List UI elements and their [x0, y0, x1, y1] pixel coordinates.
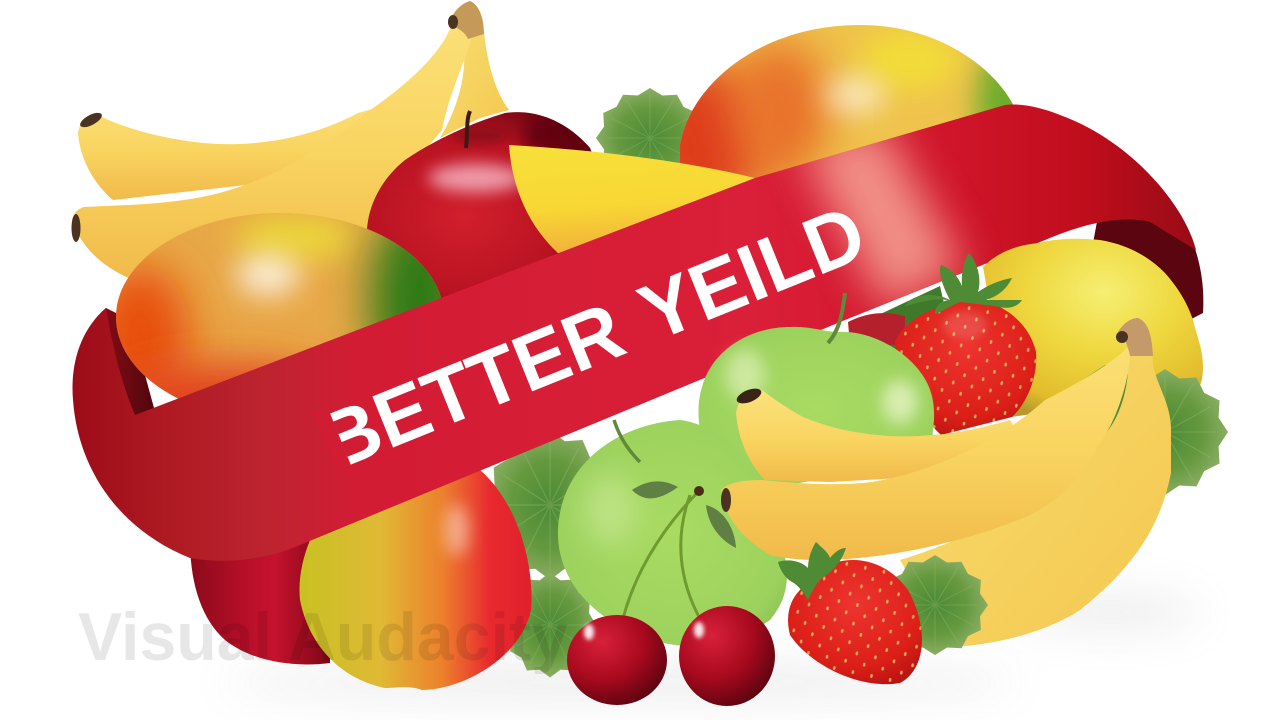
mango: left	[116, 213, 442, 398]
bananas: right	[721, 318, 1171, 647]
strawberry: top	[848, 253, 1036, 435]
ribbon: front band	[72, 104, 1196, 561]
red apple: bottom left	[190, 530, 330, 664]
watermark: Visual Audacity	[78, 599, 568, 675]
ribbon: dark inner back right	[1090, 195, 1203, 330]
green apple: large	[558, 420, 787, 646]
mango: top right	[680, 25, 1013, 184]
ribbon: dark inner back left	[74, 308, 160, 430]
leaf: behind apple	[596, 88, 704, 188]
bananas: top left	[72, 1, 509, 280]
strawberry: bottom	[778, 542, 922, 684]
ribbon label: BETTER YEILD	[308, 188, 877, 487]
mango slice	[509, 145, 755, 255]
leaves: behind green apple	[485, 430, 615, 678]
mango: bottom	[299, 470, 532, 690]
ground shadow	[220, 596, 1200, 696]
mango: right yellow	[983, 239, 1203, 417]
cherries	[567, 481, 775, 706]
leaf: bottom strawberry	[882, 555, 988, 655]
green apple: upper	[698, 293, 934, 490]
leaf: right	[1060, 365, 1228, 495]
red apple	[367, 111, 607, 301]
